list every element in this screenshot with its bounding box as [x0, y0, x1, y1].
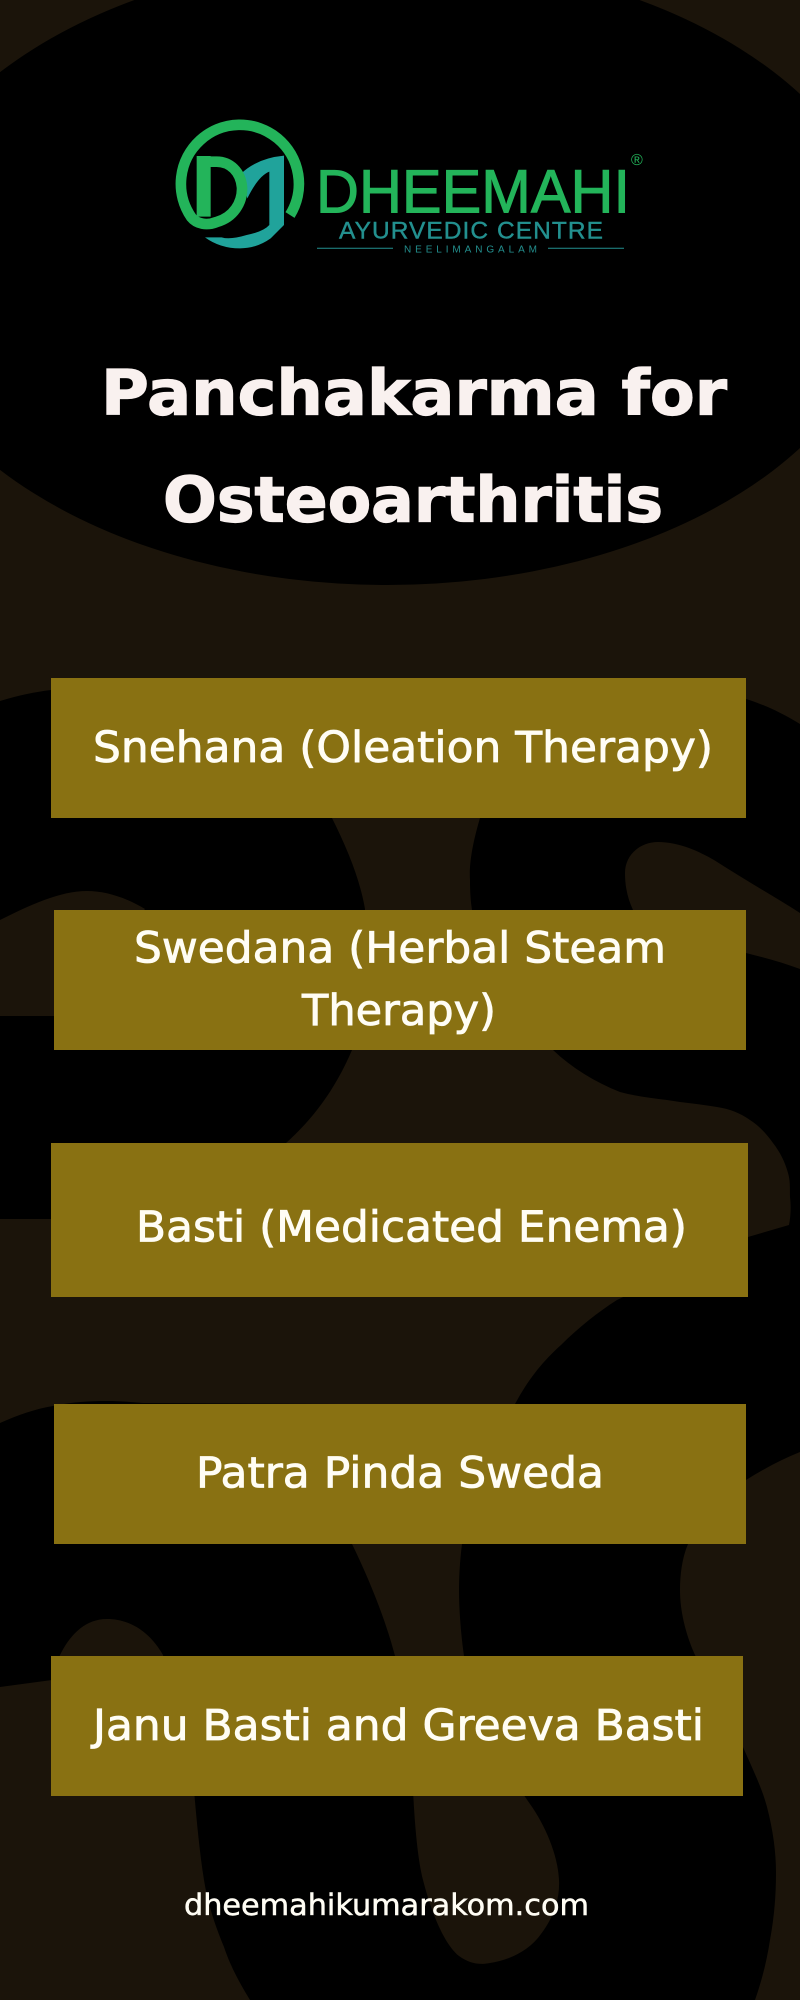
panel: Snehana — [51, 678, 746, 818]
panel: Janu Basti and Greeva Basti: Janu Basti and Greeva Basti — [90, 1702, 704, 1751]
panel: Swedana: Swedana (Herbal Steam — [134, 924, 666, 974]
location: NEELIMANGALAM — [404, 245, 537, 256]
logo: Dheemahi Ayurvedic Centre — [181, 125, 643, 256]
title — [101, 357, 727, 537]
panel: Swedana — [54, 910, 746, 1050]
panel: Basti: Basti (Medicated Enema) — [136, 1204, 687, 1252]
title: Panchakarma for — [101, 357, 727, 430]
panel: Patra Pinda Sweda — [54, 1404, 746, 1544]
wordmark: DHEEMAHI — [316, 158, 630, 226]
panel: Janu Basti and Greeva Basti — [51, 1656, 743, 1796]
footer website: dheemahikumarakom.com — [184, 1888, 589, 1922]
title: Osteoarthritis — [163, 464, 663, 537]
panel: Swedana: Therapy) — [301, 987, 496, 1036]
panel: Patra Pinda Sweda: Patra Pinda Sweda — [196, 1450, 604, 1498]
registered mark: ® — [631, 152, 643, 169]
panel: Basti — [51, 1143, 748, 1297]
panel: Snehana: Snehana (Oleation Therapy) — [93, 724, 713, 773]
subtitle: AYURVEDIC CENTRE — [339, 217, 603, 244]
logo mark: green and teal circle monogram — [181, 125, 299, 248]
